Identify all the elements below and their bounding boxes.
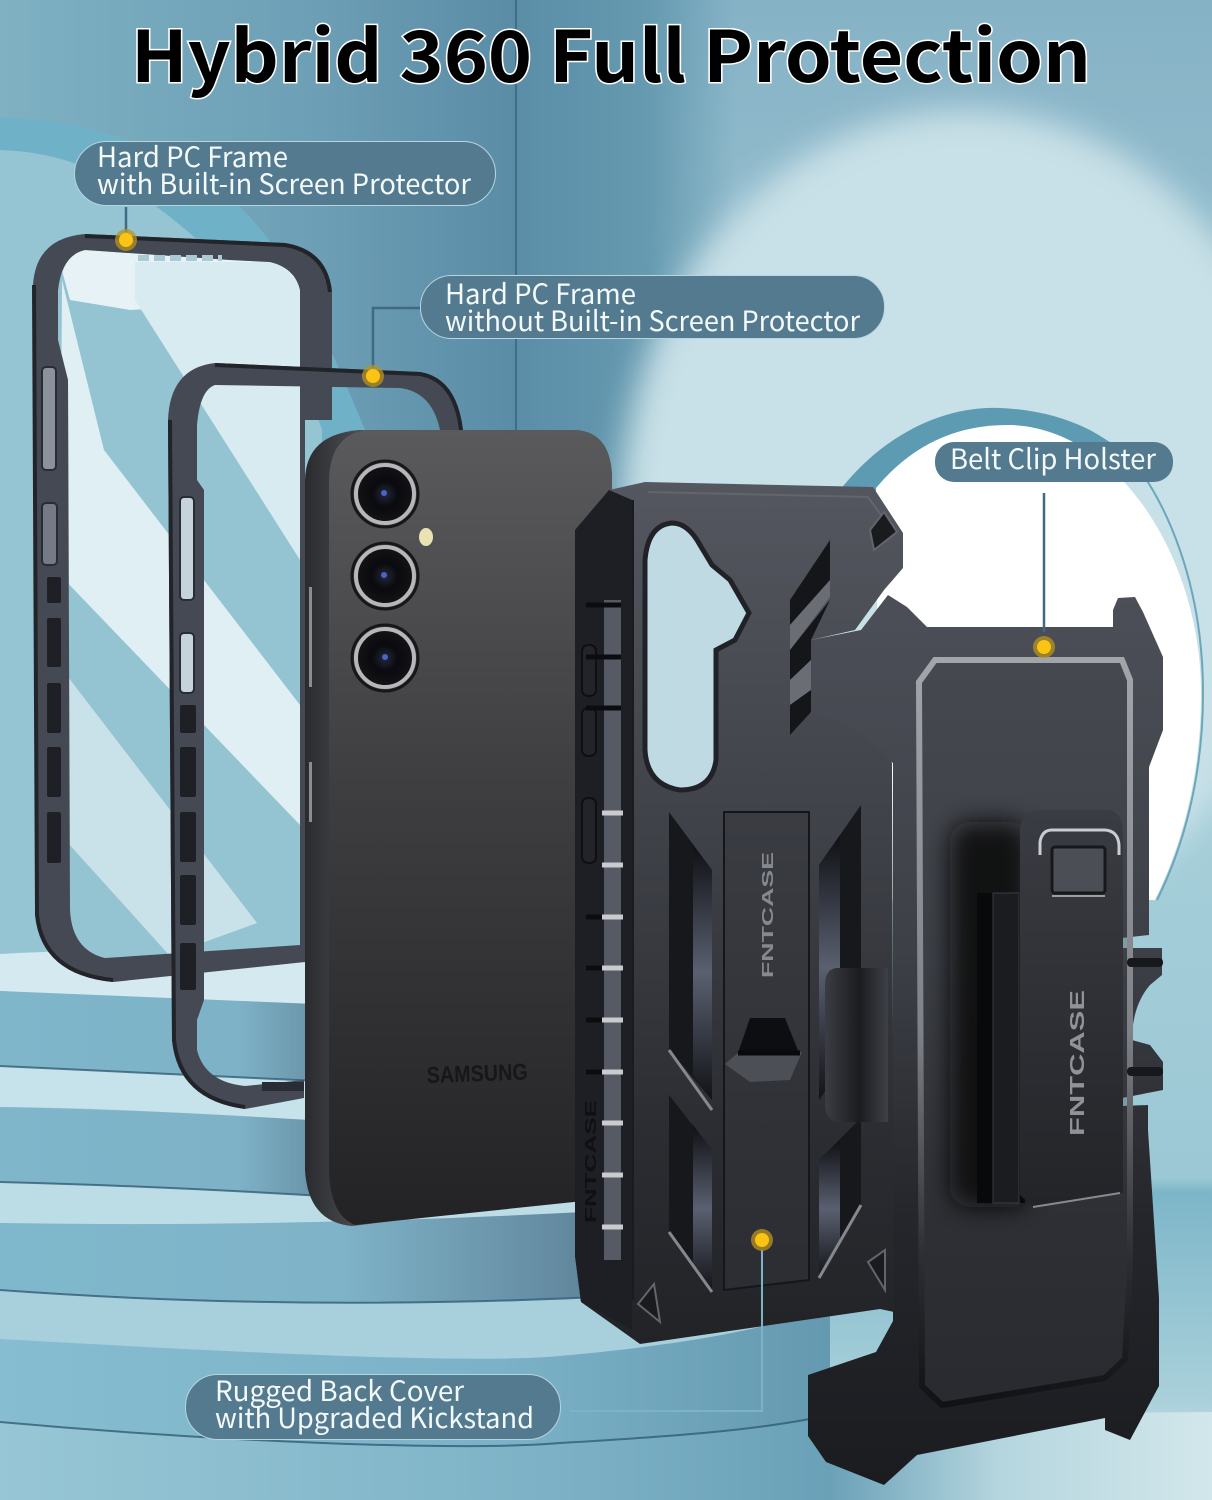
kickstand: [724, 812, 809, 1290]
title: Hybrid 360 Full Protection: [131, 1, 1091, 103]
brand on cover: FNTCASE: [760, 851, 777, 978]
callout: belt clip holster: Belt Clip Holster: [950, 438, 1156, 478]
white circle behind holster: [820, 408, 1203, 900]
grip stripes: [669, 540, 861, 1292]
callout: hard PC frame without screen protector: without Built-in Screen Protector: [445, 300, 860, 340]
corner marks: [638, 512, 897, 1322]
callout: rugged back cover: Rugged Back Cover: [215, 1370, 464, 1410]
frame without screen protector: [168, 363, 463, 1109]
phone: [305, 430, 612, 1226]
brand: SAMSUNG: [426, 1058, 528, 1088]
rugged back cover: [575, 482, 903, 1344]
callout: belt clip holster: [935, 438, 1173, 632]
belt clip holster: [808, 595, 1163, 1485]
marker dots: [115, 229, 1055, 1251]
rail ticks: [586, 605, 623, 1227]
brand on holster: FNTCASE: [1067, 990, 1089, 1136]
camera cutout: [645, 523, 749, 790]
callout: hard PC frame with screen protector: Hard PC Frame: [97, 136, 288, 176]
callout: hard PC frame without screen protector: [373, 273, 884, 368]
camera lenses: [352, 461, 433, 691]
callout: rugged back cover: with Upgraded Kickstand: [215, 1397, 534, 1437]
side buttons: [582, 645, 596, 863]
callout: rugged back cover: [186, 1250, 762, 1440]
callout: hard PC frame with screen protector: [74, 136, 496, 232]
podium steps: [0, 951, 1212, 1500]
clip band: [825, 968, 888, 1122]
callout: hard PC frame with screen protector: with Built-in Screen Protector: [97, 163, 471, 203]
frame with built-in screen protector: [33, 234, 332, 982]
callout: hard PC frame without screen protector: Hard PC Frame: [445, 273, 636, 313]
rugged back cover: FNTCASE: [583, 1099, 600, 1223]
